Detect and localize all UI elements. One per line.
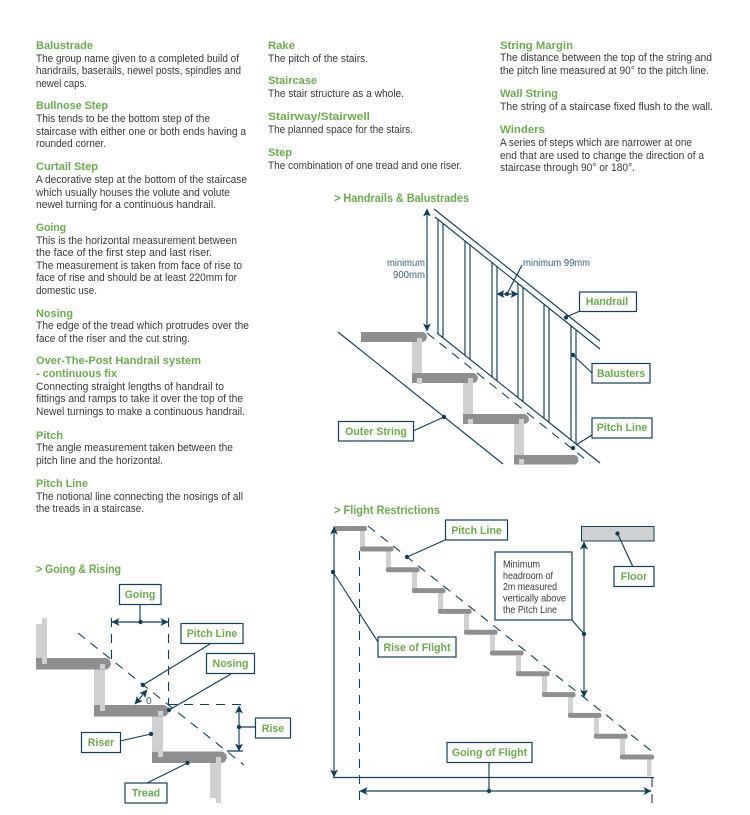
label: Rise: Rise — [262, 723, 284, 735]
label: Tread: Tread — [132, 788, 160, 800]
label: Pitch Line: Pitch Line — [597, 422, 647, 434]
term: Pitch — [36, 430, 233, 467]
label: Riser: Riser — [88, 737, 114, 749]
term: Staircase: The stair structure as a whole. — [268, 88, 404, 100]
label: Pitch Line — [405, 520, 508, 559]
term: Wall String — [500, 88, 713, 113]
label: Balusters — [571, 353, 650, 383]
label: Going — [112, 584, 168, 624]
term: Going — [36, 222, 242, 297]
headroom arrow and note: 2m measured — [503, 582, 557, 593]
headroom arrow and note: Minimum — [503, 560, 540, 570]
label: Handrail — [564, 292, 636, 320]
term: Winders — [500, 124, 705, 174]
term: Curtail Step: newel turning for a continuous handrail. — [36, 199, 216, 211]
term: Balustrade: newel caps. — [36, 78, 87, 90]
handrail lines — [434, 209, 600, 349]
term: Curtail Step: A decorative step at the bottom of the staircase — [36, 174, 247, 186]
term: Nosing: The edge of the tread which protrudes over the — [36, 320, 249, 332]
term: Going: domestic use. — [36, 285, 97, 297]
heading: Handrails & Balustrades: > Handrails & Balustrades — [334, 191, 469, 205]
label: Outer String — [338, 415, 446, 441]
term: Step: Step — [268, 147, 292, 159]
term: Going: The measurement is taken from face of rise to — [36, 260, 242, 272]
term: Over-The-Post Handrail system: Connecting straight lengths of handrail to — [36, 381, 224, 393]
term: Winders: A series of steps which are narrower at one — [500, 137, 692, 149]
headroom arrow and note: the Pitch Line — [503, 605, 557, 616]
balusters — [438, 219, 576, 444]
term: Over-The-Post Handrail system: Newel turnings to make a continuous handrail. — [36, 406, 245, 418]
label: Pitch Line — [135, 624, 243, 707]
term: Stairway/Stairwell — [268, 111, 413, 136]
term: Wall String: The string of a staircase fixed flush to the wall. — [500, 101, 713, 113]
term: Pitch Line: Pitch Line — [36, 478, 88, 490]
stair profile — [36, 618, 227, 803]
base line — [333, 776, 654, 778]
term: Curtail Step — [35, 161, 247, 211]
dashed guides — [112, 618, 243, 705]
label: Rise of Flight: Rise of Flight — [383, 642, 451, 654]
label: Nosing — [167, 654, 254, 712]
label: Going of Flight — [360, 742, 651, 793]
heading: Flight Restrictions: > Flight Restrictions — [334, 503, 440, 517]
term: Stairway/Stairwell: Stairway/Stairwell — [268, 111, 370, 123]
term: Stairway/Stairwell: The planned space for the stairs. — [268, 124, 413, 136]
term: Going: This is the horizontal measurement between — [36, 235, 237, 247]
term: Pitch Line: The notional line connecting the nosings of all — [36, 491, 243, 503]
term: Wall String: Wall String — [500, 88, 558, 100]
term: Going: Going — [36, 222, 66, 234]
term: Over-The-Post Handrail system: Over-The-Post Handrail system — [36, 355, 201, 367]
label: Pitch Line: Pitch Line — [187, 628, 237, 640]
label: Floor — [614, 531, 654, 586]
dimension: minimum 99mm — [497, 258, 590, 296]
dimension: minimum 900mm: 900mm — [393, 270, 425, 281]
term: Pitch Line: the treads in a staircase. — [36, 503, 144, 515]
label: Rise — [227, 706, 290, 751]
glossary column 1 — [35, 40, 249, 515]
term: Going: face of rise and should be at least 220mm for — [36, 272, 237, 284]
term: Balustrade: Balustrade — [36, 40, 93, 52]
label: Pitch Line: Pitch Line — [451, 525, 502, 537]
term: Going: the face of the first step and last riser. — [36, 247, 212, 259]
label: Going: Going — [125, 589, 155, 601]
heading: Going & Rising: > Going & Rising — [36, 562, 121, 576]
term: Curtail Step: Curtail Step — [36, 161, 98, 173]
term: Over-The-Post Handrail system: fittings and ramps to take it over the top of the — [36, 393, 243, 405]
diagram: going and rising — [36, 584, 290, 803]
right dashed limit — [651, 778, 653, 803]
staircase profile — [333, 526, 654, 776]
left dashed limit — [358, 551, 360, 803]
term: String Margin: String Margin — [500, 40, 573, 52]
term: Over-The-Post Handrail system — [36, 355, 245, 418]
label: Handrail: Handrail — [586, 296, 628, 308]
headroom arrow and note — [495, 542, 586, 697]
term: Bullnose Step: This tends to be the bottom step of the — [36, 113, 210, 125]
term: Nosing: face of the riser and the cut string. — [36, 333, 190, 345]
dimension: minimum 900mm — [387, 209, 427, 331]
label: Pitch Line — [571, 418, 652, 450]
term: Bullnose Step: staircase with either one or both ends having a — [36, 126, 247, 138]
term: String Margin — [500, 40, 712, 77]
dimension: minimum 99mm: minimum 99mm — [523, 258, 590, 269]
term: Nosing: Nosing — [36, 308, 73, 320]
outer string line — [338, 332, 503, 464]
term: Step — [268, 147, 462, 172]
term: Bullnose Step — [36, 100, 247, 150]
dimension: minimum 900mm: minimum — [387, 258, 425, 269]
glossary column 2 — [268, 40, 462, 172]
diagram: handrails and balustrades — [338, 209, 652, 464]
label: Floor: Floor — [621, 571, 647, 583]
term: Step: The combination of one tread and one riser. — [268, 160, 462, 172]
term: Winders: staircase through 90° or 180°. — [500, 162, 635, 174]
headroom arrow and note: headroom of — [503, 571, 553, 582]
term: Nosing — [36, 308, 249, 345]
diagram: flight restrictions — [331, 520, 654, 803]
term: Pitch: The angle measurement taken between the — [36, 442, 233, 454]
term: String Margin: the pitch line measured at 90° to the pitch line. — [500, 65, 709, 77]
steps — [361, 332, 578, 464]
label: Outer String: Outer String — [345, 426, 407, 438]
base line and pitch line — [427, 333, 600, 463]
label: Nosing: Nosing — [213, 658, 248, 670]
label: Going of Flight: Going of Flight — [452, 747, 528, 759]
label: Tread — [125, 761, 190, 803]
term: Rake: Rake — [268, 40, 295, 52]
term: Rake — [268, 40, 368, 65]
term: Balustrade — [36, 40, 241, 90]
pitch line — [78, 633, 244, 765]
term: String Margin: The distance between the top of the string and — [500, 52, 712, 64]
pitch line — [368, 526, 654, 753]
term: Pitch Line — [36, 478, 243, 515]
term: Pitch: pitch line and the horizontal. — [36, 455, 163, 467]
term: Balustrade: handrails, baserails, newel posts, spindles and — [36, 65, 241, 77]
label: Riser — [82, 732, 153, 752]
term: Winders: Winders — [500, 124, 545, 136]
headroom arrow and note: vertically above — [503, 594, 566, 604]
term: Balustrade: The group name given to a completed build of — [36, 53, 240, 65]
glossary column 3 — [500, 40, 713, 174]
label: Pitch Line: 0 — [146, 696, 152, 707]
term: Staircase: Staircase — [268, 75, 317, 87]
term: Bullnose Step: rounded corner. — [36, 138, 106, 150]
label: Balusters: Balusters — [597, 368, 645, 380]
term: Winders: end that are used to change the direction of a — [500, 150, 705, 162]
term: Over-The-Post Handrail system: - continuous fix — [36, 368, 118, 380]
term: Staircase — [268, 75, 404, 100]
term: Rake: The pitch of the stairs. — [268, 53, 368, 65]
label: Rise of Flight — [331, 527, 456, 777]
term: Bullnose Step: Bullnose Step — [36, 100, 108, 112]
floor slab — [582, 526, 654, 541]
term: Curtail Step: which usually houses the volute and volute — [35, 187, 230, 199]
term: Pitch: Pitch — [36, 430, 63, 442]
